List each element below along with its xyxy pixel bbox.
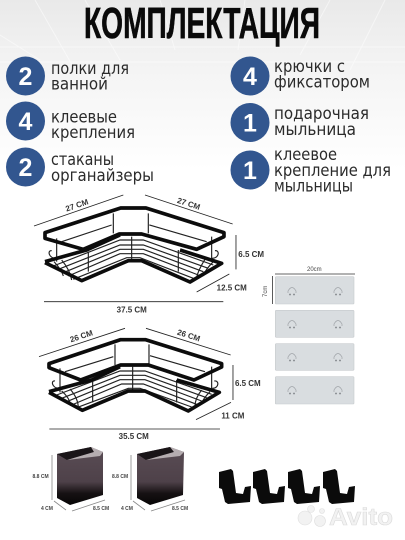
- item: 4 adhesive mounts: [6, 102, 135, 143]
- diagram: small corner shelf: 26 CM: [176, 328, 202, 344]
- diagram: small corner shelf: 26 CM: [69, 328, 94, 344]
- item: 2 organizer cups: [6, 148, 154, 186]
- adhesive mounting plates: 20cm: [307, 267, 322, 273]
- adhesive mounting plates: [263, 267, 355, 404]
- diagram: large corner shelf: 27 CM: [64, 197, 90, 214]
- adhesive mounting plates: 7cm: [263, 286, 269, 297]
- avito watermark: Avito: [329, 504, 393, 531]
- item: 2 shelves: ванной: [51, 74, 108, 94]
- item: 1 soap dish mount: крепление для: [274, 161, 391, 181]
- avito watermark: [298, 504, 393, 531]
- diagram: large corner shelf: 12.5 CM: [217, 283, 247, 292]
- list: set contents: [6, 56, 391, 196]
- item: 4 hooks: [230, 56, 370, 96]
- item: 2 shelves: 2: [19, 63, 32, 91]
- organizer cup right: 8.5 CM: [172, 506, 188, 512]
- item: 4 adhesive mounts: клеевые: [51, 108, 117, 128]
- item: 1 soap dish mount: клеевое: [274, 145, 337, 165]
- organizer cup right: 4 CM: [121, 506, 133, 512]
- item: 1 soap dish mount: [230, 145, 391, 196]
- organizer cup left: 4 CM: [41, 506, 53, 512]
- item: 4 hooks: фиксатором: [274, 72, 370, 92]
- diagram: large corner shelf: [34, 195, 264, 314]
- diagram: small corner shelf: [39, 328, 261, 441]
- item: 4 adhesive mounts: крепления: [51, 123, 135, 143]
- diagram: large corner shelf: 6.5 CM: [238, 250, 264, 259]
- item: 2 organizer cups: 2: [19, 154, 32, 182]
- item: 1 soap dish: мыльница: [274, 120, 356, 140]
- diagram: small corner shelf: 35.5 CM: [119, 432, 149, 441]
- item: 2 shelves: [6, 56, 129, 96]
- organizer cup right: 8.8 CM: [112, 474, 128, 480]
- item: 4 adhesive mounts: 4: [19, 108, 33, 136]
- item: 1 soap dish: подарочная: [274, 104, 369, 124]
- item: 1 soap dish: [230, 103, 369, 142]
- diagram: large corner shelf: 37.5 CM: [117, 305, 147, 314]
- organizer cup right: [112, 447, 188, 512]
- diagram: small corner shelf: 11 CM: [221, 411, 245, 420]
- hooks: [219, 469, 355, 504]
- organizer cup left: 8.5 CM: [93, 506, 109, 512]
- item: 4 hooks: 4: [243, 63, 257, 91]
- organizer cup left: [32, 447, 109, 512]
- item: 1 soap dish mount: 1: [243, 157, 257, 185]
- item: 1 soap dish mount: мыльницы: [274, 176, 353, 196]
- item: 1 soap dish: 1: [243, 110, 257, 138]
- organizer cup left: 8.8 CM: [32, 474, 49, 480]
- item: 2 organizer cups: органайзеры: [51, 166, 154, 186]
- item: 2 organizer cups: стаканы: [51, 150, 114, 170]
- diagram: small corner shelf: 6.5 CM: [235, 379, 261, 388]
- item: 4 hooks: крючки с: [274, 57, 345, 77]
- diagram: large corner shelf: 27 CM: [176, 196, 202, 212]
- item: 2 shelves: полки для: [51, 59, 129, 79]
